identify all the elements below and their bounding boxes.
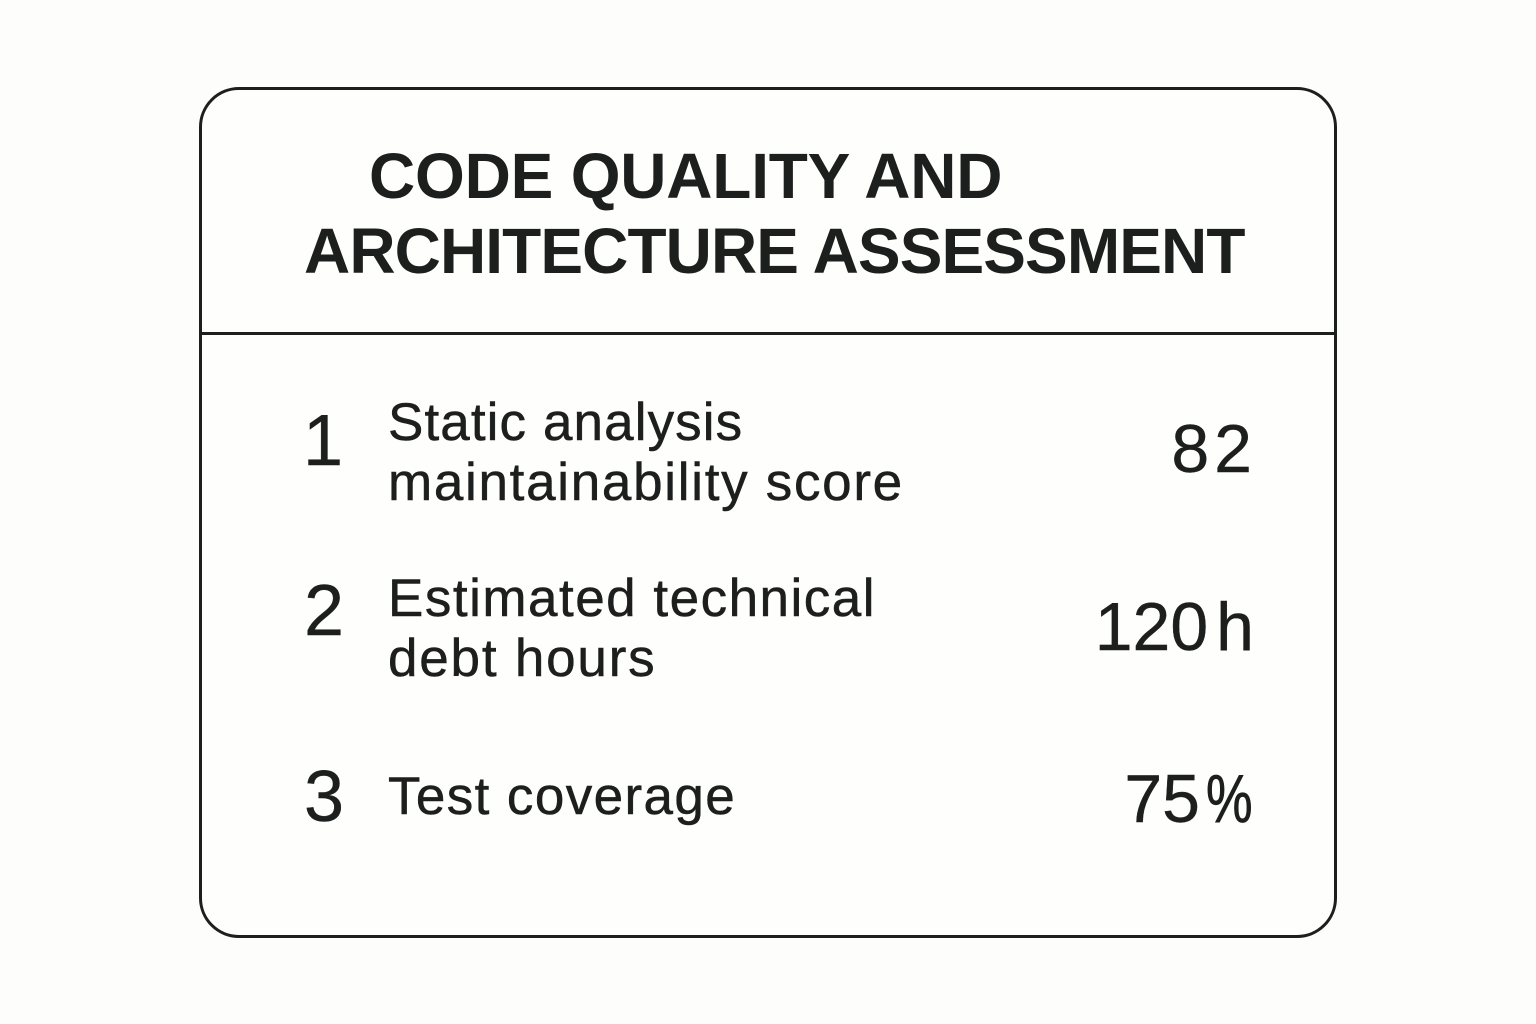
row 1: static analysis [303, 393, 1257, 512]
heading line 2: ARCHITECTURE ASSESSMENT [304, 215, 1245, 287]
row 2 label: Estimated technical [388, 569, 876, 628]
row 2 number: 2 [304, 571, 344, 651]
row 2 value: 120h [1095, 589, 1254, 665]
row 3 number: 3 [304, 757, 344, 837]
row 3 value [1124, 761, 1253, 837]
row 2 label [388, 569, 876, 688]
row 3 value: 75 [1124, 761, 1200, 837]
row 1 number: 1 [303, 401, 343, 481]
row 1 label [388, 393, 904, 512]
heading line 1: CODE QUALITY AND [369, 140, 1002, 212]
row 1 value: 82 [1171, 411, 1257, 487]
row 3: test coverage [304, 757, 1253, 837]
row 2: technical debt [304, 569, 1254, 688]
row 3 label: Test coverage [388, 767, 736, 826]
row 2 label: debt hours [388, 629, 656, 688]
heading [304, 140, 1245, 287]
row 1 label: maintainability score [388, 453, 904, 512]
row 3 value: % [1206, 761, 1253, 837]
panel: assessment card [199, 87, 1337, 938]
header divider [201, 332, 1335, 335]
row 1 label: Static analysis [388, 393, 743, 452]
